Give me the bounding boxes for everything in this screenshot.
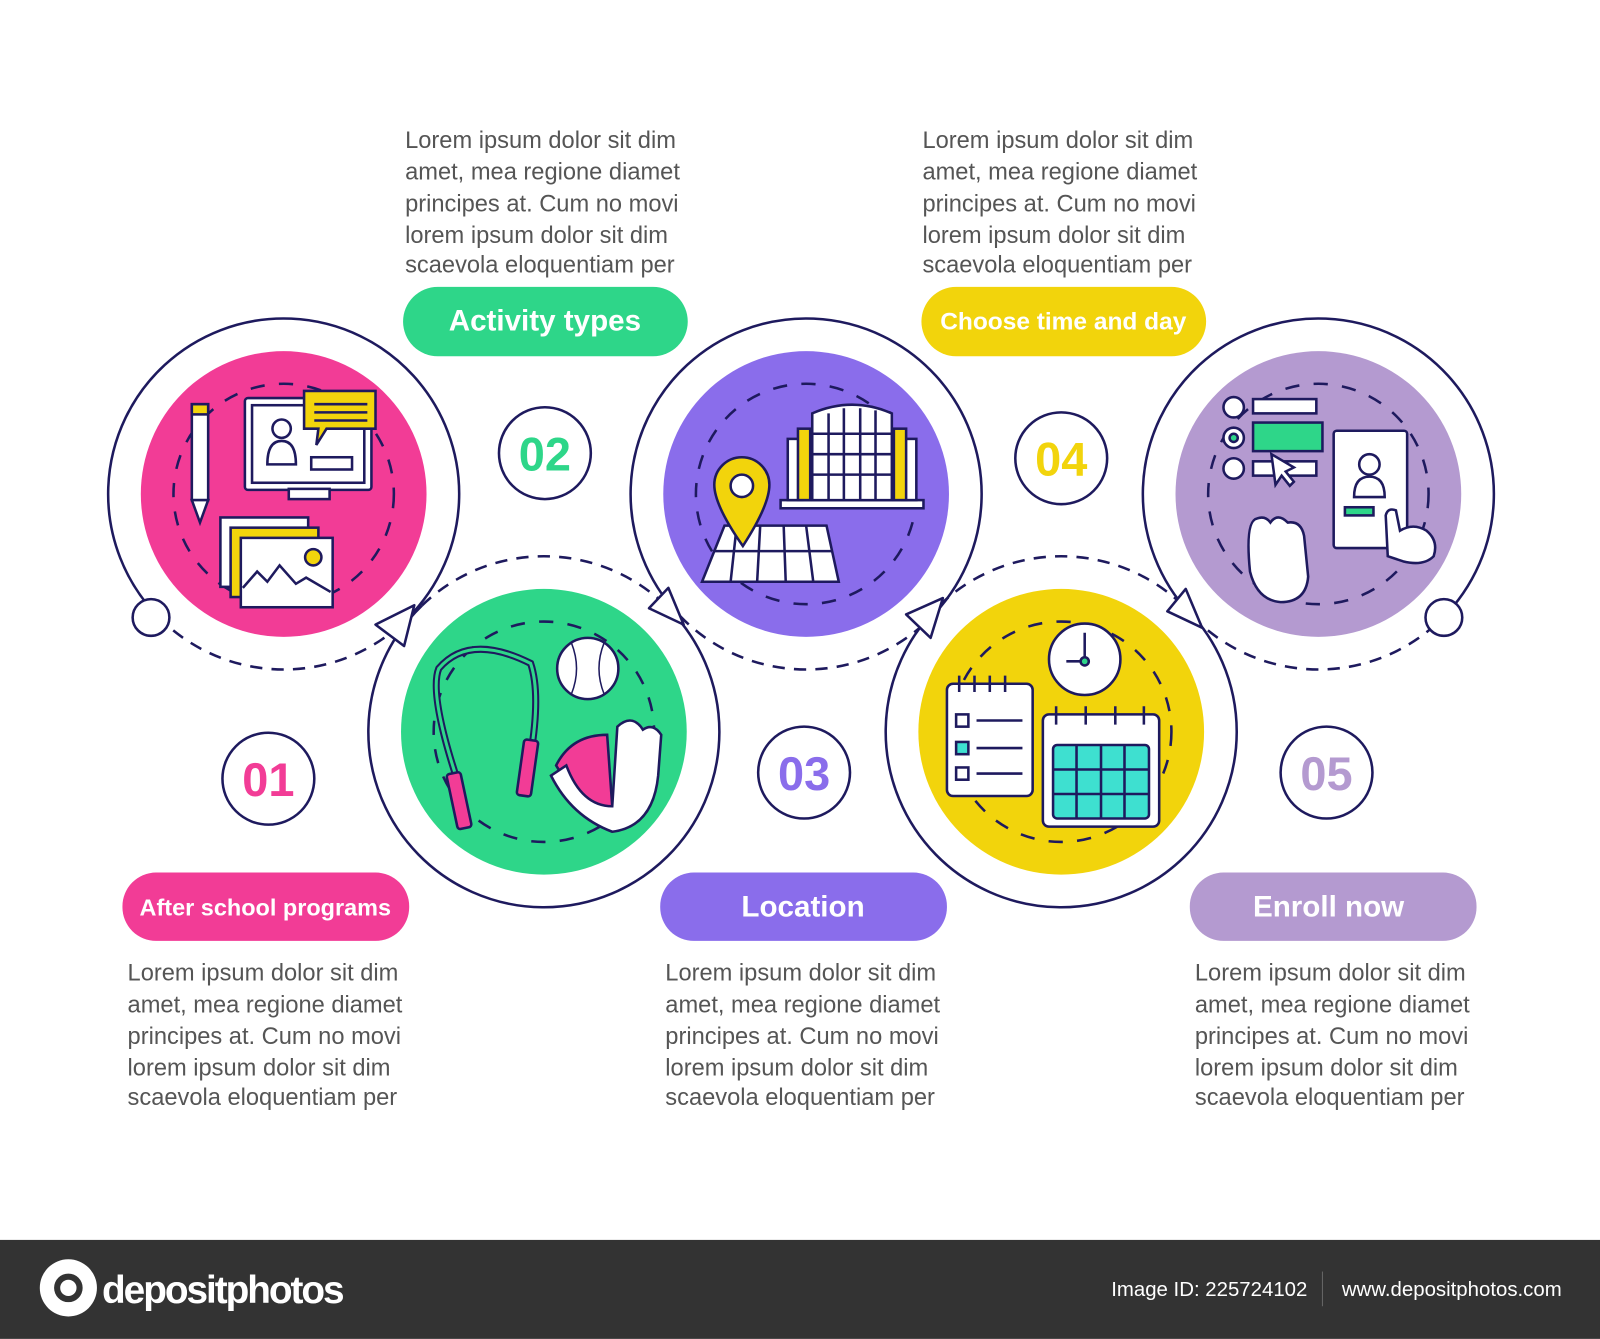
text blocks: Lorem ipsum dolor sit dim <box>128 961 398 987</box>
pill labels: After school programs <box>140 894 391 920</box>
pill labels: Activity types <box>449 305 641 338</box>
text blocks <box>128 128 1470 1111</box>
icon: computer, pencil, pictures <box>192 391 376 607</box>
numbers: 05 <box>1300 748 1353 800</box>
icon: enrollment form <box>1223 397 1435 602</box>
text blocks: principes at. Cum no movi <box>922 191 1196 217</box>
outer ring 1 <box>108 318 459 669</box>
numbers <box>242 429 1353 806</box>
text blocks: amet, mea regione diamet <box>405 160 680 186</box>
text blocks: principes at. Cum no movi <box>665 1024 939 1050</box>
pill labels: Choose time and day <box>940 309 1187 336</box>
numbers: 04 <box>1035 434 1087 486</box>
text blocks: amet, mea regione diamet <box>128 992 403 1018</box>
text blocks: Lorem ipsum dolor sit dim <box>1195 961 1466 987</box>
numbers: 02 <box>519 429 571 481</box>
footer bar <box>0 1240 1600 1339</box>
icon: map pin, building <box>702 405 923 582</box>
text blocks: scaevola eloquentiam per <box>922 253 1192 279</box>
text blocks: scaevola eloquentiam per <box>1195 1085 1465 1111</box>
text blocks: lorem ipsum dolor sit dim <box>405 223 668 249</box>
outer ring 2 <box>368 556 719 907</box>
text blocks: amet, mea regione diamet <box>665 992 941 1018</box>
text blocks: amet, mea regione diamet <box>922 160 1198 186</box>
inner circles <box>141 351 1461 875</box>
start circle <box>133 599 169 636</box>
icon: jump rope, ball, glove <box>436 638 661 832</box>
text blocks: amet, mea regione diamet <box>1195 992 1470 1018</box>
arrows <box>376 588 1202 646</box>
pill labels: Enroll now <box>1253 890 1405 923</box>
end circle <box>1426 599 1462 636</box>
text blocks: Lorem ipsum dolor sit dim <box>922 128 1193 154</box>
footer bar: Image ID: 225724102 <box>1111 1279 1307 1301</box>
text blocks: lorem ipsum dolor sit dim <box>1195 1056 1458 1082</box>
text blocks: lorem ipsum dolor sit dim <box>128 1056 390 1082</box>
text blocks: scaevola eloquentiam per <box>665 1085 935 1111</box>
footer bar: depositphotos <box>102 1269 343 1312</box>
pills <box>122 287 1477 941</box>
outer ring 3 <box>631 318 982 669</box>
text blocks: Lorem ipsum dolor sit dim <box>665 961 936 987</box>
pill labels <box>140 305 1405 923</box>
text blocks: principes at. Cum no movi <box>405 191 679 217</box>
pill labels: Location <box>741 890 865 923</box>
text blocks: scaevola eloquentiam per <box>128 1085 397 1111</box>
outer ring 5 <box>1143 318 1494 669</box>
numbers: 03 <box>778 748 830 800</box>
outer ring 4 <box>886 556 1237 907</box>
text blocks: scaevola eloquentiam per <box>405 253 675 279</box>
text blocks: principes at. Cum no movi <box>1195 1024 1468 1050</box>
footer bar: www.depositphotos.com <box>1341 1279 1562 1301</box>
icon: calendars and clock <box>947 624 1159 827</box>
number badges <box>222 407 1372 825</box>
inner dashed rings <box>173 384 1429 842</box>
text blocks: lorem ipsum dolor sit dim <box>922 223 1185 249</box>
text blocks: Lorem ipsum dolor sit dim <box>405 128 676 154</box>
text blocks: lorem ipsum dolor sit dim <box>665 1056 928 1082</box>
text blocks: principes at. Cum no movi <box>128 1024 401 1050</box>
numbers: 01 <box>242 754 294 806</box>
